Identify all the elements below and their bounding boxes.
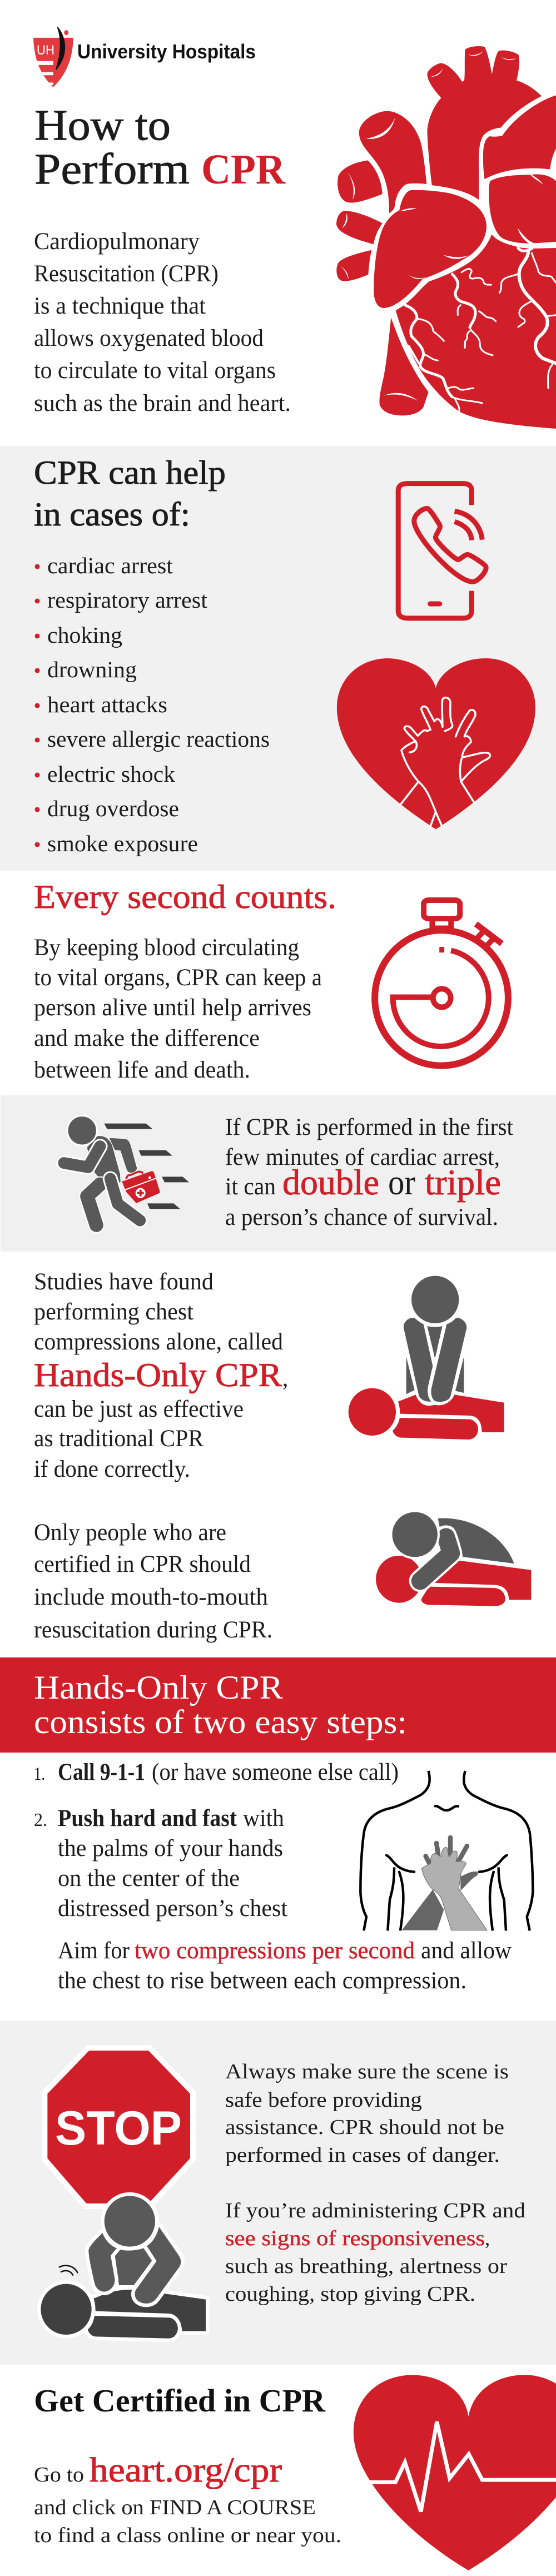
panel: safety: [0, 2021, 556, 2365]
step 2: push hard and fast: the palms of your hands: [58, 1835, 283, 1862]
text block: chance of survival: triple: [425, 1163, 501, 1203]
bullet list: drowning: [47, 657, 137, 682]
step 2: push hard and fast: [34, 1805, 287, 1922]
text block: heart.org link: and click on FIND A COURSE: [34, 2496, 316, 2519]
logo: University Hospitals: University Hospitals: [77, 40, 256, 63]
text block: studies have found: if done correctly.: [34, 1456, 190, 1482]
icon: stopwatch: [375, 900, 508, 1066]
bullet list: respiratory arrest: [47, 587, 208, 613]
text block: studies have found: can be just as effective: [34, 1396, 244, 1422]
heading: CPR can help in cases of: CPR can help: [34, 454, 226, 491]
text block: signs of responsiveness: such as breathing, alertness or: [225, 2255, 507, 2278]
text block: studies have found: [34, 1269, 288, 1482]
text block: signs of responsiveness: [225, 2199, 525, 2306]
text block: signs of responsiveness: see signs of responsiveness: [225, 2227, 485, 2250]
bullet list: smoke exposure: [47, 831, 198, 856]
icon: heart with hands: [337, 658, 535, 829]
intro paragraph: such as the brain and heart.: [34, 390, 291, 416]
text block: scene safety: Always make sure the scene is: [225, 2060, 509, 2083]
intro paragraph: [34, 229, 291, 416]
text block: scene safety: safe before providing: [225, 2088, 422, 2112]
text block: studies have found: compressions alone, called: [34, 1329, 283, 1355]
intro paragraph: to circulate to vital organs: [34, 358, 276, 384]
text block: keeping blood circulating: By keeping blood circulating: [34, 935, 299, 961]
bullet list: drug overdose: [47, 796, 179, 821]
step 2: push hard and fast: 2.: [34, 1810, 47, 1830]
icon: chest compression figure: [349, 1276, 504, 1440]
text block: heart.org link: [34, 2451, 341, 2547]
text block: only certified people: resuscitation during CPR.: [34, 1617, 272, 1643]
text block: two compressions per second: the chest to rise between each compression.: [58, 1968, 466, 1994]
step 2: push hard and fast: with: [243, 1805, 284, 1832]
text block: scene safety: assistance. CPR should not be: [225, 2116, 504, 2139]
text block: scene safety: performed in cases of danger.: [225, 2143, 500, 2167]
heading: CPR can help in cases of: [34, 454, 226, 533]
text block: studies have found: ,: [282, 1366, 288, 1391]
text block: chance of survival: or: [388, 1163, 415, 1203]
panel: get certified: [34, 2375, 556, 2570]
text block: chance of survival: If CPR is performed in the first: [225, 1114, 513, 1140]
text block: studies have found: Hands-Only CPR: [34, 1357, 282, 1393]
title: [34, 101, 286, 193]
intro paragraph: Cardiopulmonary: [34, 229, 200, 255]
text block: signs of responsiveness: ,: [485, 2227, 490, 2250]
bullet list: [34, 553, 270, 856]
intro paragraph: allows oxygenated blood: [34, 325, 264, 351]
text block: two compressions per second: and allow: [421, 1938, 512, 1964]
icon: running person with first aid kit: [64, 1116, 189, 1225]
logo: University Hospitals: [33, 27, 256, 87]
icon: phone: [398, 484, 486, 618]
icon: mouth-to-mouth figure: [376, 1511, 531, 1606]
text block: studies have found: Studies have found: [34, 1269, 214, 1295]
step 1: call 9-1-1: [34, 1759, 399, 1785]
step 1: call 9-1-1: Call 9-1-1: [58, 1759, 145, 1785]
text block: studies have found: performing chest: [34, 1299, 193, 1325]
text block: keeping blood circulating: and make the difference: [34, 1025, 260, 1051]
text block: signs of responsiveness: coughing, stop giving CPR.: [225, 2282, 475, 2306]
text block: keeping blood circulating: between life and death.: [34, 1057, 250, 1083]
panel: double or triple survival: [1, 1095, 556, 1252]
text block: only certified people: include mouth-to-mouth: [34, 1584, 268, 1610]
icon: anatomical heart: [336, 46, 556, 429]
heading: Hands-Only CPR consists of two easy steps: [34, 1669, 407, 1740]
panel: two easy steps banner: [0, 1657, 556, 1753]
text block: heart.org link: to find a class online or near you.: [34, 2524, 341, 2547]
text block: keeping blood circulating: person alive until help arrives: [34, 995, 311, 1021]
text block: signs of responsiveness: If you’re administering CPR and: [225, 2199, 525, 2222]
text block: chance of survival: few minutes of cardiac arrest,: [225, 1144, 500, 1170]
text block: two compressions per second: [58, 1938, 512, 1994]
panel: every second counts: [34, 878, 508, 1083]
heading: CPR can help in cases of: in cases of:: [34, 496, 190, 533]
intro paragraph: is a technique that: [34, 293, 206, 319]
bullet list: cardiac arrest: [47, 553, 173, 578]
text block: heart.org link: Go to: [34, 2463, 84, 2486]
heading: Every second counts: Every second counts.: [34, 878, 336, 915]
text block: scene safety: [225, 2060, 509, 2167]
panel: steps: [34, 1759, 533, 1994]
title: Perform: [34, 145, 190, 193]
text block: two compressions per second: Aim for: [58, 1938, 130, 1964]
bullet list: electric shock: [47, 761, 175, 787]
text block: studies have found: as traditional CPR: [34, 1426, 203, 1452]
title: CPR: [201, 146, 286, 193]
bullet list: choking: [47, 622, 122, 648]
step 1: call 9-1-1: 1.: [34, 1764, 45, 1784]
icon: stop sign: [44, 2048, 193, 2206]
text block: keeping blood circulating: [34, 935, 322, 1083]
panel: CPR can help: [0, 446, 556, 871]
text block: only certified people: Only people who are: [34, 1520, 226, 1546]
heading: Hands-Only CPR consists of two easy steps: Hands-Only CPR: [34, 1669, 283, 1706]
icon: heart with pulse line: [354, 2375, 556, 2570]
icon: person giving CPR: [41, 2196, 206, 2339]
intro paragraph: Resuscitation (CPR): [34, 261, 219, 287]
title: How to: [34, 101, 171, 149]
text block: chance of survival: [225, 1114, 513, 1230]
heading: Get Certified in CPR: Get Certified in CPR: [34, 2383, 326, 2419]
text block: only certified people: certified in CPR should: [34, 1551, 251, 1577]
icon: stop sign: STOP: [55, 2102, 182, 2155]
text block: only certified people: [34, 1520, 272, 1643]
bullet list: severe allergic reactions: [47, 726, 270, 752]
logo: University Hospitals: UH: [37, 43, 54, 58]
heading: Hands-Only CPR consists of two easy steps: consists of two easy steps:: [34, 1704, 407, 1740]
text block: chance of survival: it can: [225, 1174, 276, 1200]
text block: keeping blood circulating: to vital organs, CPR can keep a: [34, 965, 322, 991]
step 1: call 9-1-1: (or have someone else call): [152, 1759, 399, 1785]
icon: hands on chest: [360, 1771, 533, 1930]
bullet list: heart attacks: [47, 692, 167, 717]
text block: chance of survival: double: [282, 1163, 379, 1203]
panel: intro: [33, 27, 556, 429]
text block: heart.org link: heart.org/cpr: [90, 2451, 282, 2489]
step 2: push hard and fast: distressed person’s chest: [58, 1895, 287, 1922]
text block: chance of survival: a person’s chance of survival.: [225, 1204, 498, 1230]
text block: two compressions per second: two compressions per second: [135, 1938, 415, 1964]
step 2: push hard and fast: Push hard and fast: [58, 1805, 237, 1832]
step 2: push hard and fast: on the center of the: [58, 1865, 240, 1892]
panel: hands-only intro: [34, 1269, 531, 1643]
